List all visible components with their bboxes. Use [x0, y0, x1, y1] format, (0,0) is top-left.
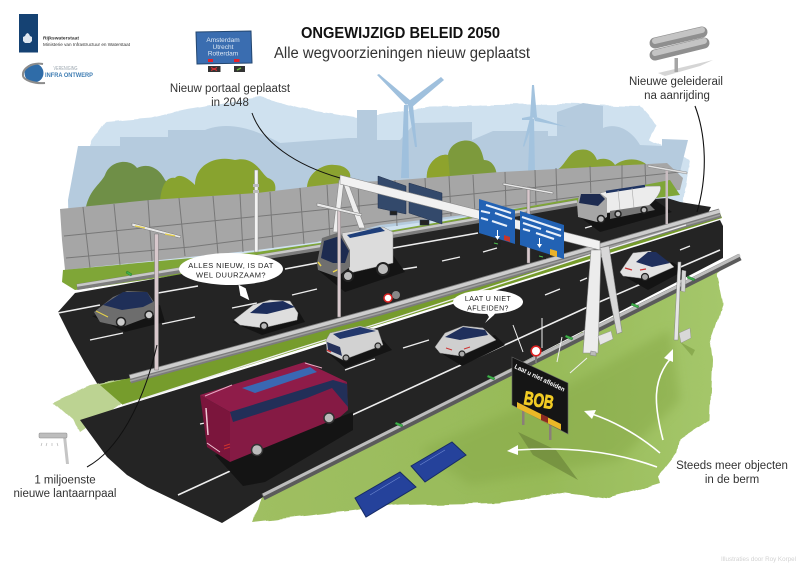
- bubble: alles nieuw: ALLES NIEUW, IS DAT: [188, 261, 274, 270]
- bubble: alles nieuw: WEL DUURZAAM?: [196, 270, 266, 280]
- road: near carriageway: [80, 220, 723, 523]
- label: nieuwe geleiderail: na aanrijding: [644, 90, 710, 102]
- lamp post middle: [317, 203, 362, 317]
- green road markers: [126, 271, 695, 427]
- label: nieuw portaal: Nieuw portaal geplaatst: [170, 83, 291, 95]
- car: white: [234, 300, 298, 330]
- vehicle shadows far: [92, 200, 672, 335]
- portal beam: [340, 175, 600, 250]
- portal left legs: [333, 180, 365, 232]
- highlight lines around billboard: [513, 318, 587, 373]
- credit: Illustraties door Roy Korpel: [721, 556, 797, 563]
- label: objecten in de berm: Steeds meer objecten: [676, 460, 788, 472]
- blue signs: [479, 199, 564, 259]
- leader: lantaarnpaal: [87, 345, 157, 467]
- far guard rail: [77, 202, 577, 287]
- logo: Vereniging Infra Ontwerp: VERENIGING: [54, 66, 78, 72]
- car: near lane: [435, 326, 496, 357]
- speed sign roadside: [531, 346, 541, 363]
- logo: Rijkswaterstaat: [19, 14, 131, 52]
- billboard BOB: Laat u niet afleiden: [513, 363, 566, 393]
- solar panels: [355, 442, 466, 517]
- road: far carriageway: [58, 198, 720, 385]
- bubble: laat u niet afleiden: [453, 290, 523, 323]
- trees: [85, 141, 650, 212]
- car: right: [620, 251, 674, 280]
- median guard rail: [130, 211, 720, 381]
- panel: noise barrier: [60, 163, 683, 270]
- logo: Vereniging Infra Ontwerp: INFRA ONTWERP: [45, 73, 93, 79]
- label: nieuw portaal: in 2048: [211, 97, 249, 109]
- bus: [200, 362, 348, 462]
- billboard BOB: BOB: [522, 388, 555, 414]
- bubble: laat u niet afleiden: LAAT U NIET: [465, 296, 511, 303]
- icon: guard rail: [655, 30, 713, 76]
- near guard rail: [263, 255, 740, 497]
- verge far side: [62, 180, 680, 290]
- grass verge: [253, 258, 735, 522]
- lane markings near carriageway: [123, 225, 720, 495]
- truck: [317, 227, 393, 281]
- icon: portal sign: Utrecht: [213, 44, 234, 51]
- wind turbine right: [522, 85, 567, 172]
- car: grey: [94, 291, 154, 327]
- icon: lamp: [39, 433, 69, 464]
- tanker truck: [577, 186, 661, 222]
- logo: Rijkswaterstaat: Rijkswaterstaat: [43, 36, 79, 40]
- billboard BOB: [512, 357, 578, 480]
- subtitle: Alle wegvoorzieningen nieuw geplaatst: [274, 45, 531, 62]
- green wash left of median: [53, 378, 135, 432]
- logo: Vereniging Infra Ontwerp: [23, 64, 93, 83]
- leader: geleiderail: [695, 106, 704, 212]
- lamp post far side (mast): [253, 170, 259, 252]
- side pole and box: [674, 262, 695, 356]
- van: [326, 326, 383, 361]
- icon: portal sign: Amsterdam: [206, 37, 240, 44]
- bubble: laat u niet afleiden: AFLEIDEN?: [467, 306, 509, 312]
- label: lantaarnpaal: nieuwe lantaarnpaal: [14, 488, 116, 500]
- median grass strip: [100, 213, 722, 405]
- portal dark panels: [378, 176, 442, 225]
- city silhouette: [68, 103, 688, 270]
- wind turbine left: [377, 74, 444, 178]
- lamp post left: [132, 223, 181, 370]
- sky wash: [70, 97, 690, 280]
- lane markings far carriageway: [58, 220, 592, 340]
- bubble: alles nieuw: [179, 253, 283, 301]
- verge darker tone: [420, 330, 680, 485]
- icon: portal sign: Rotterdam: [208, 50, 238, 58]
- car shadows near: [215, 262, 685, 486]
- leader: portaal: [252, 113, 340, 178]
- portal right legs: [583, 246, 622, 356]
- arrows in the verge: [507, 349, 673, 467]
- label: objecten in de berm: in de berm: [705, 474, 759, 486]
- lamp post right: [503, 183, 553, 263]
- logo: Rijkswaterstaat: Ministerie van Infrastructuur en Waterstaat: [43, 42, 131, 47]
- title: ONGEWIJZIGD BELEID 2050: [301, 25, 500, 42]
- speed sign median: [384, 291, 400, 302]
- label: lantaarnpaal: 1 miljoenste: [34, 474, 96, 486]
- label: nieuwe geleiderail: Nieuwe geleiderail: [629, 76, 723, 88]
- cabinet near portal: [598, 331, 613, 345]
- icon: portal sign: [196, 31, 252, 72]
- lamp post far right: [648, 165, 687, 224]
